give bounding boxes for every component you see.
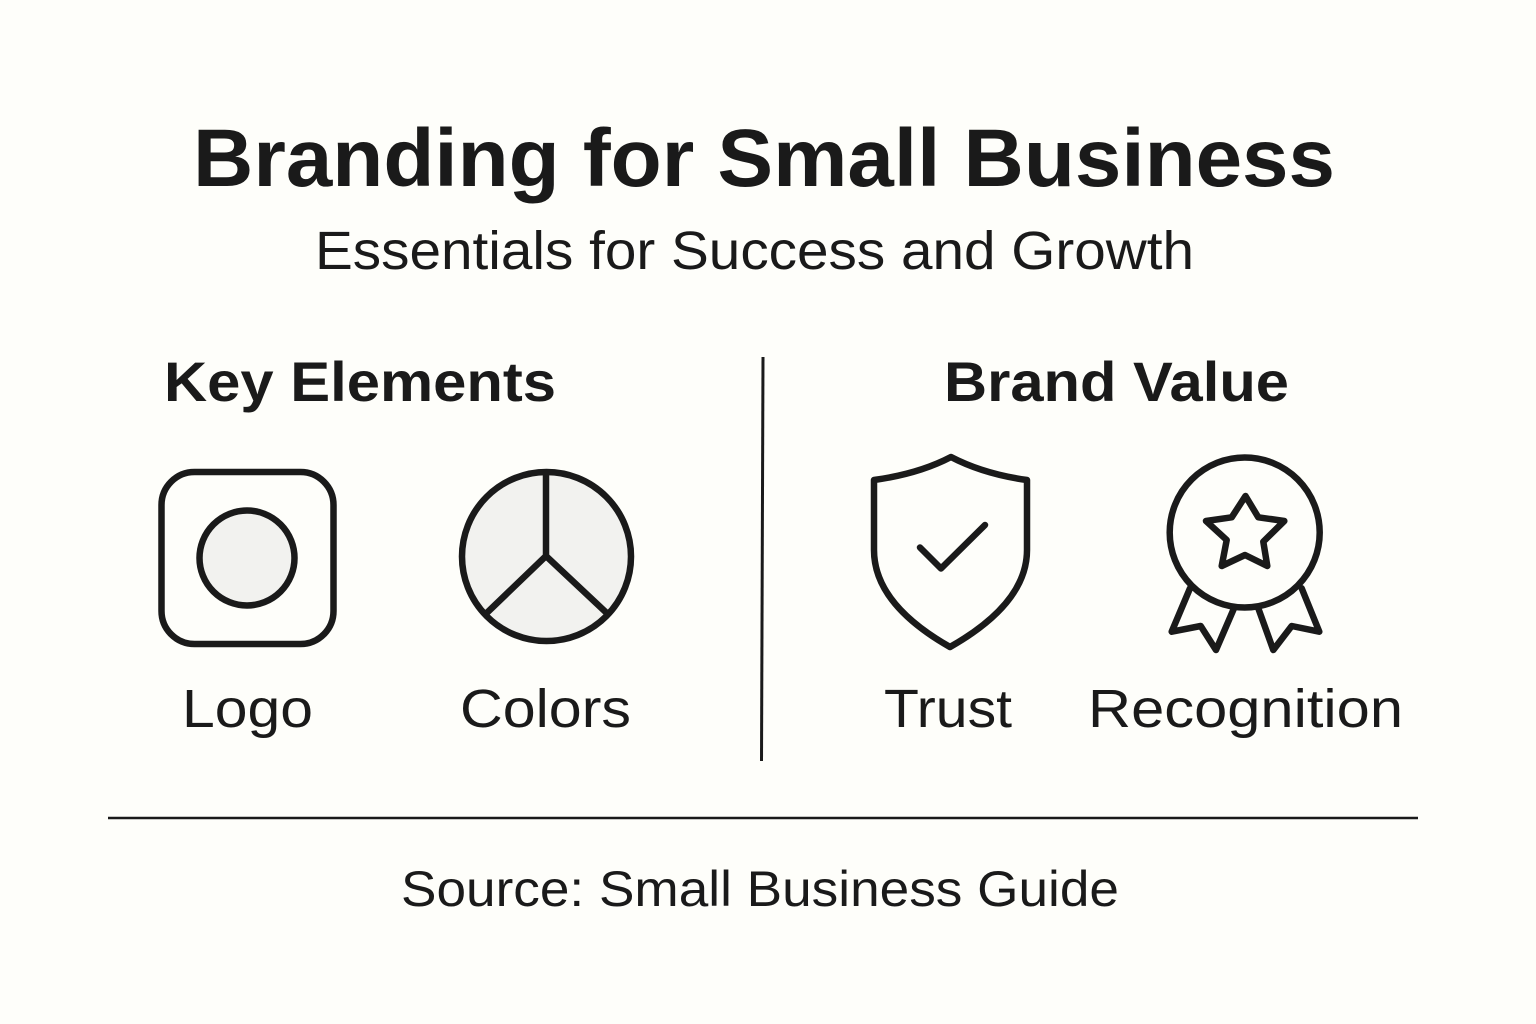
subtitle: Essentials for Success and Growth <box>315 221 1194 281</box>
icon: logo <box>162 472 334 644</box>
panel: key elements <box>162 350 631 739</box>
heading: brand value: Brand Value <box>944 350 1289 413</box>
source note: Source: Small Business Guide <box>401 861 1119 917</box>
icon: trust shield <box>874 457 1027 647</box>
label: logo: Logo <box>182 679 313 739</box>
icon: recognition medal <box>1170 458 1320 650</box>
title: Branding for Small Business <box>193 113 1335 204</box>
panel: brand value <box>874 350 1403 739</box>
label: colors: Colors <box>460 679 631 739</box>
heading: key elements: Key Elements <box>164 350 556 413</box>
label: recognition: Recognition <box>1088 679 1403 739</box>
label: trust: Trust <box>884 679 1012 739</box>
icon: colors <box>462 472 631 641</box>
